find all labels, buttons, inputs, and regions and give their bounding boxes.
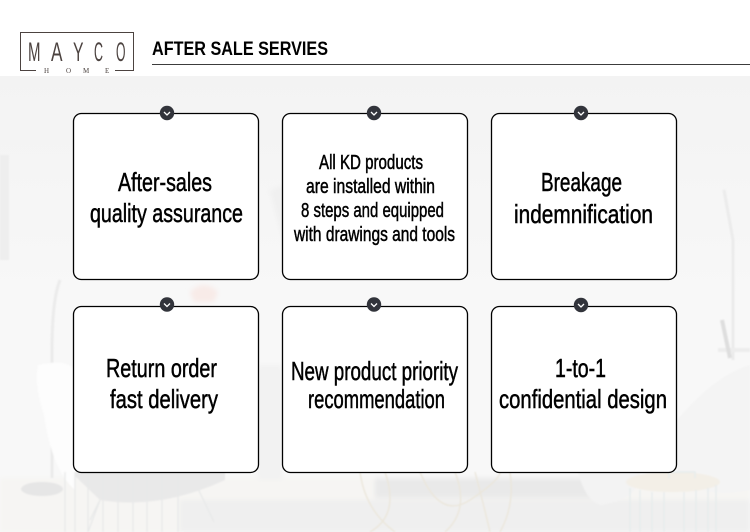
panel: return order fast delivery [74,297,258,472]
text: KD products installation: 8 steps and equipped [301,200,444,222]
text: after-sales quality assurance: quality assurance [90,198,243,228]
icon: chevron badge [367,106,381,120]
text: return order fast delivery: fast delivery [110,384,218,414]
text: 1-to-1 confidential design: confidential design [499,384,667,414]
icon: chevron badge [574,106,588,120]
panel: new product priority recommendation [282,297,468,472]
text: 1-to-1 confidential design: 1-to-1 [555,353,606,383]
text: breakage indemnification: indemnification [514,199,653,229]
logo: Mayco Home [20,32,134,75]
panel: KD products installation [282,106,468,280]
icon: chevron badge [367,297,381,312]
text: after-sales quality assurance: After-sales [118,167,212,197]
logo: Mayco Home: M [83,67,90,75]
text: KD products installation: are installed within [306,176,435,198]
logo: Mayco Home: O [116,37,126,67]
logo: Mayco Home: O [66,67,71,75]
text: new product priority recommendation: recommendation [308,384,445,414]
text: return order fast delivery: Return order [106,353,217,383]
icon: chevron badge [160,297,174,312]
logo: Mayco Home: A [51,37,62,67]
panel: breakage indemnification [492,106,676,280]
logo: Mayco Home: Y [73,37,84,67]
panel: 1-to-1 confidential design [492,298,676,472]
text: KD products installation: with drawings and tools [293,224,455,246]
icon: chevron badge [574,298,588,312]
logo: Mayco Home: H [44,67,49,75]
panel: after-sales quality assurance [74,106,258,280]
logo: Mayco Home: C [94,37,103,67]
logo: Mayco Home: E [105,67,109,75]
heading: AFTER SALE SERVIES [152,39,328,60]
logo: Mayco Home: M [28,37,40,67]
text: new product priority recommendation: New product priority [291,356,458,386]
icon: chevron badge [160,106,174,120]
text: KD products installation: All KD products [319,152,423,174]
text: breakage indemnification: Breakage [541,167,622,197]
